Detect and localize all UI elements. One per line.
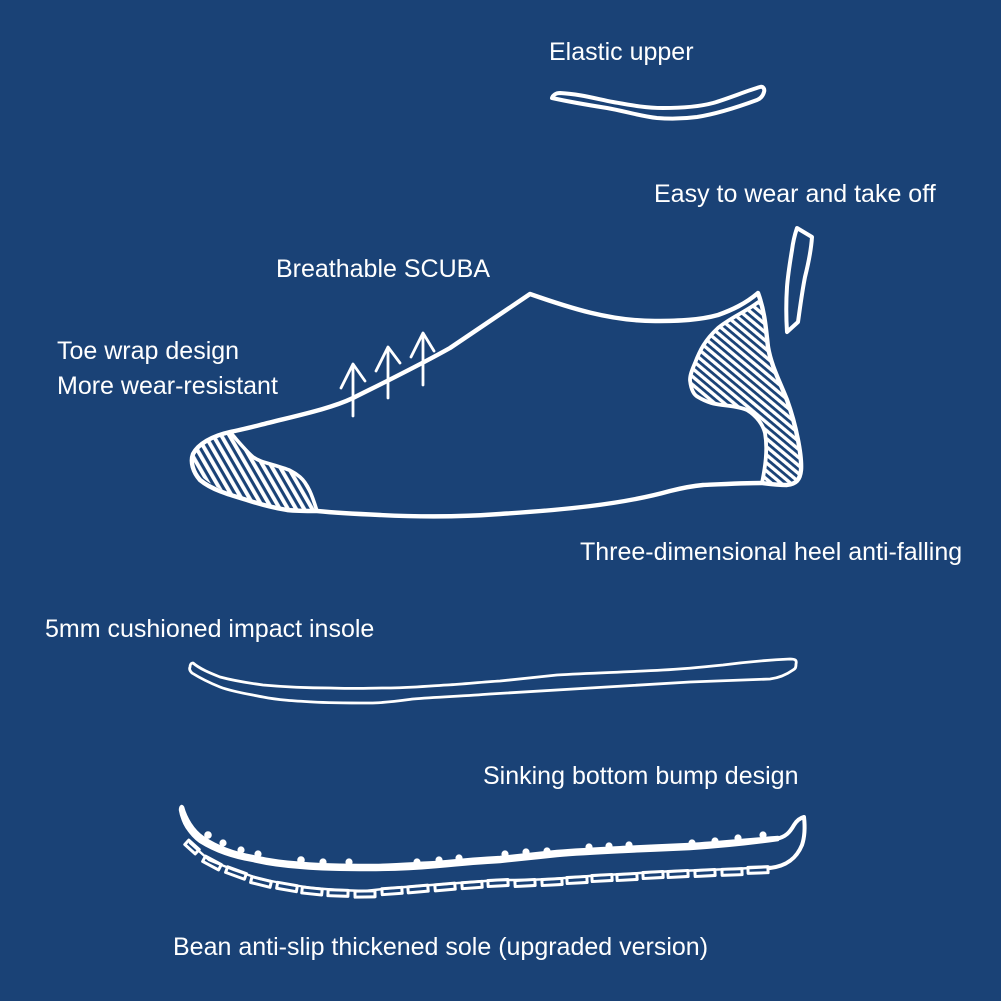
label: easy to wear: Easy to wear and take off [654,180,936,208]
shoe illustration [192,293,801,516]
label: elastic upper: Elastic upper [549,38,694,66]
label: toe wrap: More wear-resistant [57,372,278,400]
outsole [180,806,805,897]
label: breathable scuba: Breathable SCUBA [276,255,490,283]
heel cup line [770,817,805,868]
sole top line [180,806,778,870]
label: bean sole: Bean anti-slip thickened sole (upgraded version) [173,933,708,961]
label: toe wrap: Toe wrap design [57,337,239,365]
heel pull tab [786,228,812,332]
label: insole: 5mm cushioned impact insole [45,615,374,643]
insole [190,659,796,703]
label: toe wrap [57,337,278,400]
label: sinking bottom: Sinking bottom bump design [483,762,798,790]
toe panel line [230,432,317,511]
inner heel line [183,820,192,834]
tread connecting line [190,843,770,891]
elastic upper piece [552,87,764,119]
breathability arrows [341,333,434,416]
toe hatching [193,432,317,511]
heel hatching [690,300,801,485]
heel panel line [690,303,766,483]
label: heel: Three-dimensional heel anti-falling [580,538,962,566]
bumps [204,831,767,866]
tread blocks [185,840,768,897]
shoe outline [192,293,801,516]
